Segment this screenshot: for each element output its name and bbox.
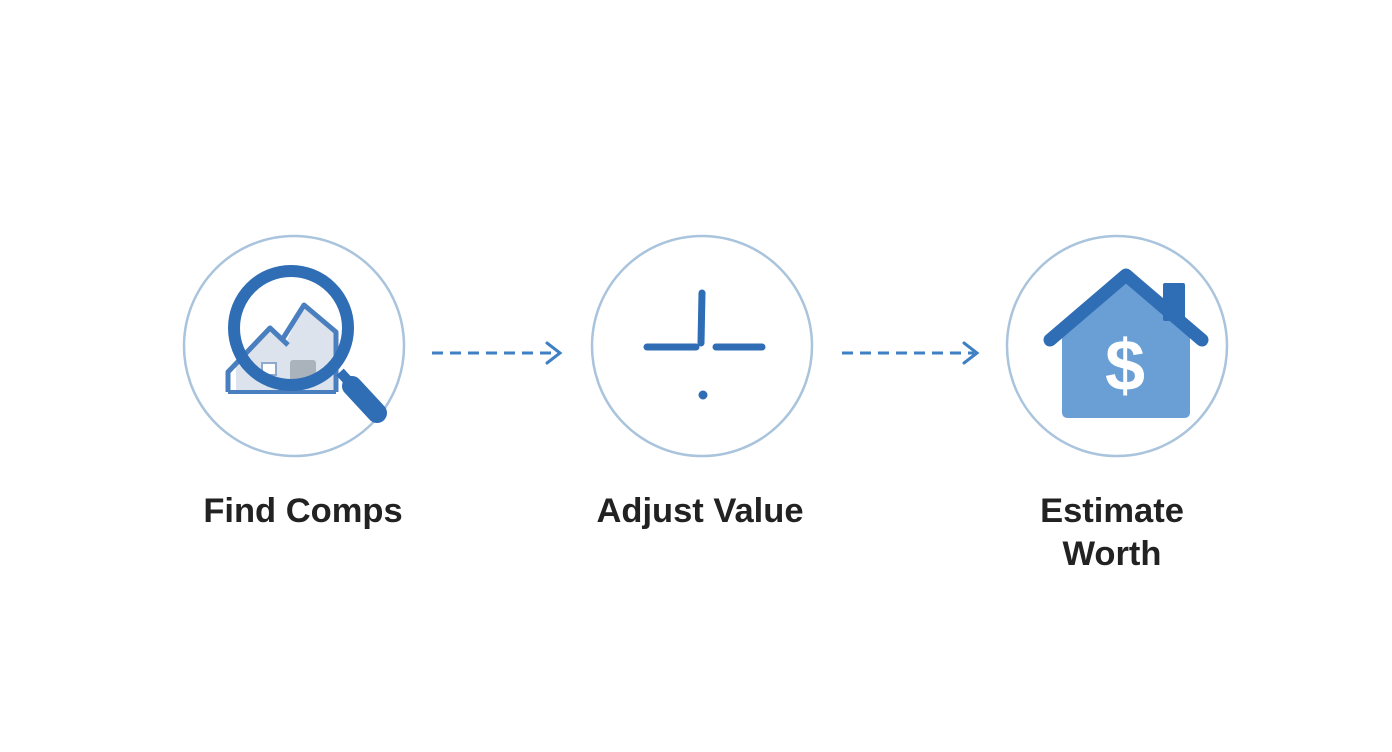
arrow 1 xyxy=(432,343,560,363)
icon: adjust lines xyxy=(647,293,762,398)
label: Estimate Worth: Estimate xyxy=(1040,492,1184,530)
label: Adjust Value: Adjust Value xyxy=(596,492,804,530)
label: Find Comps: Find Comps xyxy=(203,492,403,530)
arrow 2 xyxy=(842,343,977,363)
icon: house under magnifier xyxy=(228,271,377,413)
label: Estimate Worth: Worth xyxy=(1062,535,1162,573)
step 2 circle with adjust icon xyxy=(592,236,812,456)
step 1 circle with magnifier icon xyxy=(184,236,404,456)
label: Estimate Worth xyxy=(1040,492,1184,573)
icon: house with dollar: $ xyxy=(1105,326,1145,406)
step 3 circle with house dollar icon xyxy=(1007,236,1227,456)
icon: house with dollar xyxy=(1050,275,1202,418)
